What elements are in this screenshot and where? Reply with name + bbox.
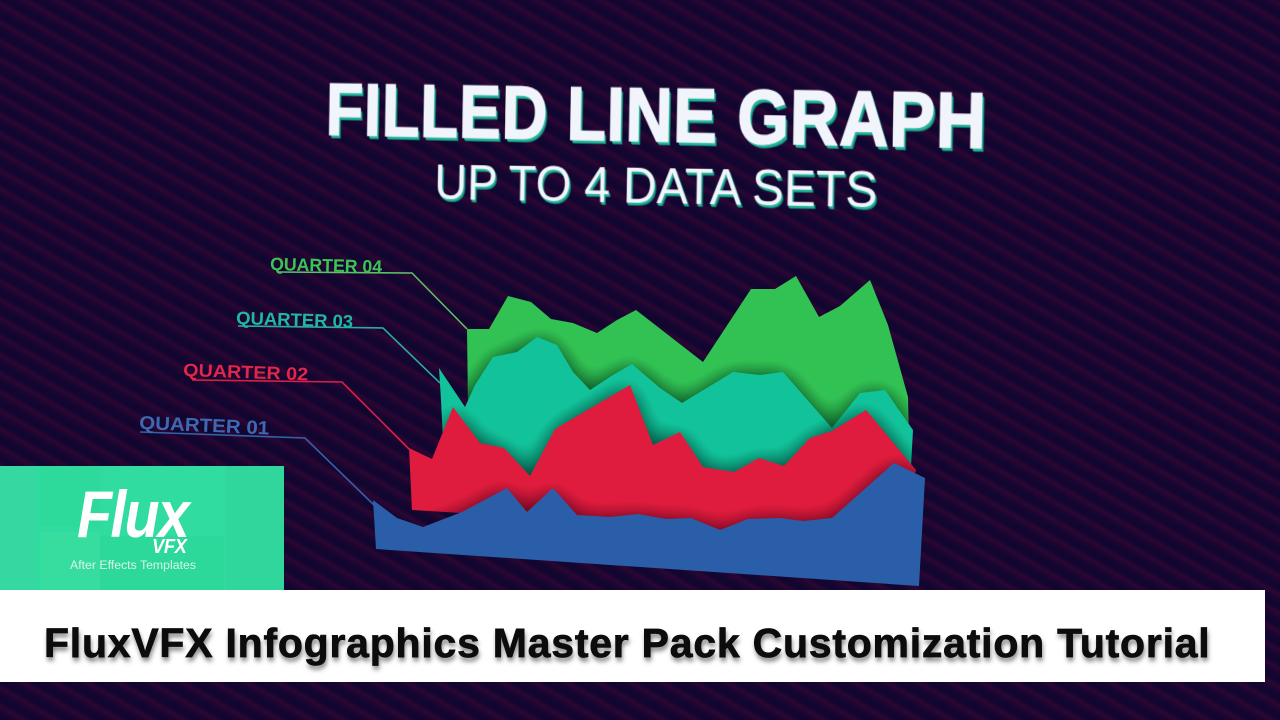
bottom caption bar [0,590,1265,682]
series: quarter 03 teal area [439,337,913,500]
logo tagline: After Effects Templates [70,558,196,572]
filled line chart with labels [140,258,925,586]
label: quarter 01: QUARTER 01 [139,413,270,439]
shadow of red on teal [442,382,912,476]
shadow of blue on red [430,457,916,530]
label: quarter 04: QUARTER 04 [270,254,382,277]
logo wordmark VFX: VFX [152,536,186,558]
series: quarter 01 blue area [373,463,925,586]
label: quarter 02 [183,360,410,450]
logo texture tiles [0,466,284,590]
shadow of teal on green [468,330,908,428]
series: quarter 02 red area [409,385,916,540]
subtitle: UP TO 4 DATA SETS [434,155,878,218]
label: quarter 03 [236,308,440,383]
caption text: FluxVFX Infographics Master Pack Customization Tutorial [44,620,1210,666]
label: quarter 03: QUARTER 03 [236,308,353,332]
logo wordmark Flux: Flux [77,477,188,551]
label: quarter 01 [139,413,374,505]
label: quarter 04 [270,254,467,329]
logo panel [0,466,284,590]
title: FILLED LINE GRAPH [325,69,988,166]
series: quarter 04 green area [467,276,909,455]
label: quarter 02: QUARTER 02 [183,360,308,384]
